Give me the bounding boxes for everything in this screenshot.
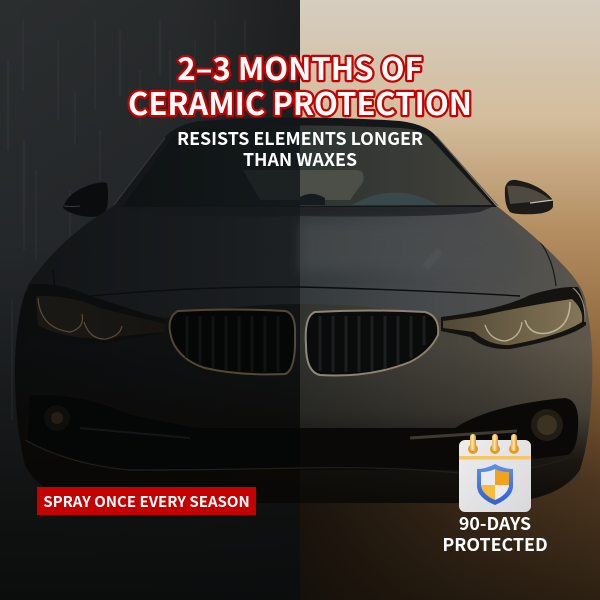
car: left mirror <box>63 183 108 217</box>
subtitle: THAN WAXES <box>243 146 357 172</box>
car <box>0 118 600 510</box>
car: hood <box>20 207 590 318</box>
title <box>128 44 472 124</box>
car: fog lights <box>44 405 563 441</box>
car: lower bumper shadow, right <box>300 367 592 503</box>
icon: shield <box>477 464 513 505</box>
car: body <box>0 200 600 510</box>
car: lower bumper shadow, left <box>23 412 300 503</box>
label: 90-days protected: 90-DAYS <box>459 510 531 536</box>
car: right lower intake <box>300 398 578 470</box>
car: right headlight <box>441 287 586 349</box>
subtitle <box>177 125 423 172</box>
label: 90-days protected <box>442 510 548 557</box>
car: right mirror <box>505 180 553 214</box>
car: roof and windshield <box>112 118 498 208</box>
background: warm dusty right half <box>300 0 600 600</box>
background: rainy dark left half <box>0 0 300 600</box>
icon: calendar with shield <box>459 434 531 512</box>
car: left lower intake <box>116 409 117 410</box>
label: 90-days protected: PROTECTED <box>442 531 548 557</box>
car: left grille <box>170 310 295 374</box>
title: 2–3 MONTHS OF <box>177 44 423 89</box>
callout: spray once every season: SPRAY ONCE EVERY SEASON <box>43 491 250 512</box>
car: left headlight <box>24 284 165 344</box>
car: right grille <box>306 310 438 375</box>
title: CERAMIC PROTECTION <box>128 79 472 124</box>
icon: calendar rings <box>468 434 519 454</box>
subtitle: RESISTS ELEMENTS LONGER <box>177 125 423 151</box>
